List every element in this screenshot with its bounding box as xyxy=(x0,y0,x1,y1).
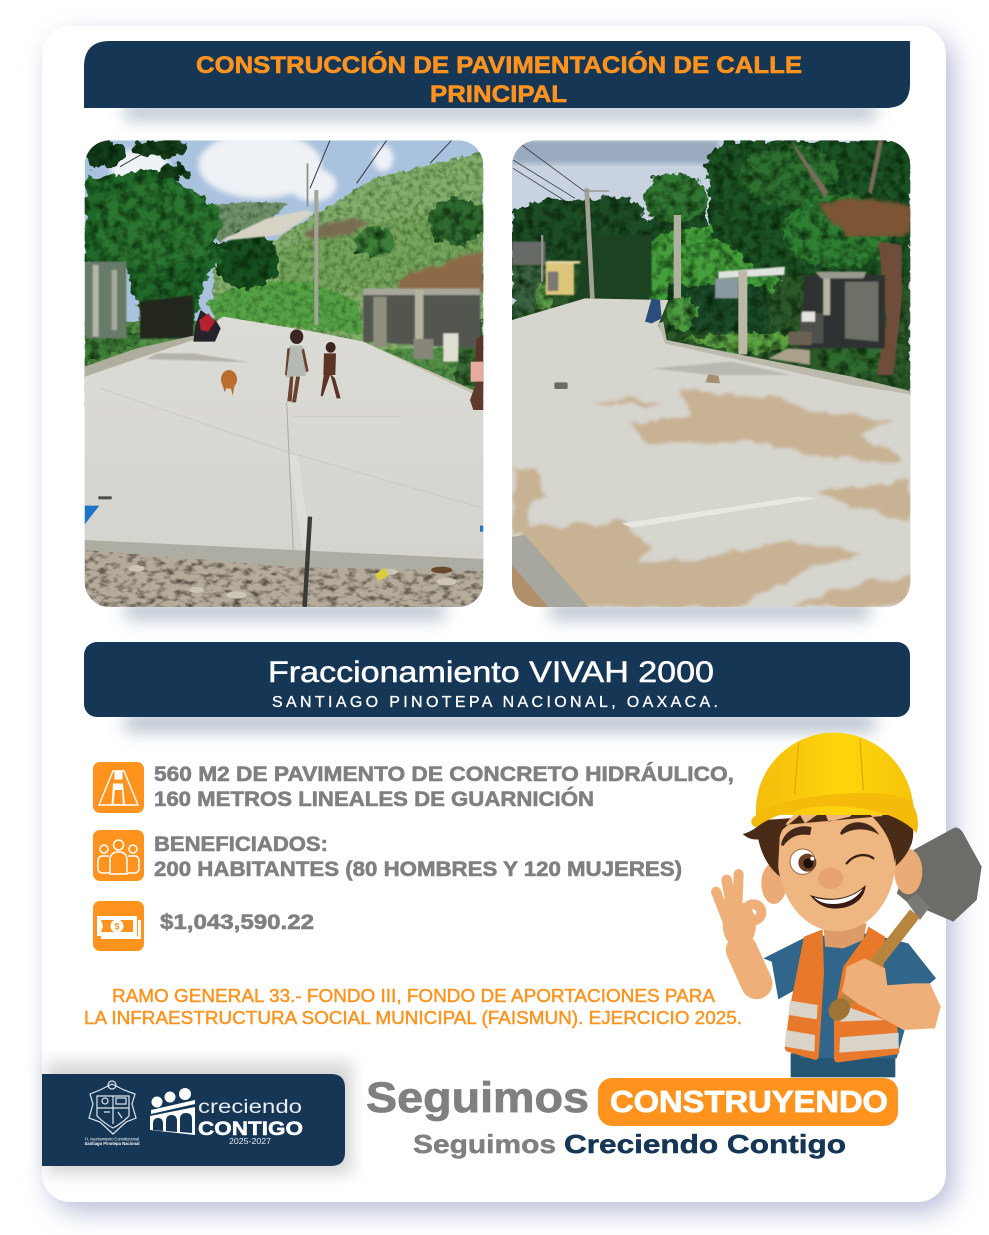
vest xyxy=(785,927,899,1062)
slogan: Seguimos xyxy=(413,1129,556,1159)
mascot: construction worker xyxy=(716,733,982,1077)
location name: Fraccionamiento VIVAH 2000 xyxy=(268,656,714,689)
shovel neck and handle xyxy=(824,893,930,1025)
pavement text xyxy=(154,763,734,811)
municipality name: H. Ayuntamiento Constitucional xyxy=(85,1136,139,1142)
icon: road xyxy=(93,762,144,813)
logo: creciendo contigo: creciendo xyxy=(198,1097,302,1118)
logo: creciendo contigo: CONTIGO xyxy=(198,1119,303,1140)
item: beneficiaries xyxy=(93,830,682,881)
photo: right street with sand xyxy=(512,140,910,620)
footer logo panel xyxy=(42,1062,352,1174)
title xyxy=(196,51,802,108)
motorcycle xyxy=(193,310,221,342)
pavement text: 560 M2 DE PAVIMENTO DE CONCRETO HIDRÁULICO, xyxy=(154,763,734,786)
icon: banknotes xyxy=(93,901,144,951)
shovel blade xyxy=(897,827,982,922)
back hair xyxy=(743,810,913,877)
tree masses xyxy=(83,138,487,385)
face xyxy=(777,799,896,931)
hair fringe xyxy=(765,806,913,875)
grassy hill xyxy=(85,152,483,408)
location subtitle: SANTIAGO PINOTEPA NACIONAL, OAXACA. xyxy=(272,694,718,711)
pavement text: 160 METROS LINEALES DE GUARNICIÓN xyxy=(154,787,594,811)
open eye xyxy=(790,849,816,874)
foliage xyxy=(512,140,910,392)
funding note xyxy=(84,986,742,1028)
neck xyxy=(823,923,867,948)
sand xyxy=(512,392,910,607)
right arm and gripping hand xyxy=(842,958,941,1030)
construyendo pill xyxy=(598,1078,898,1126)
logo: creciendo contigo xyxy=(150,1088,303,1146)
beneficiaries text: 200 HABITANTES (80 HOMBRES Y 120 MUJERES) xyxy=(154,858,682,881)
wink xyxy=(847,855,873,863)
pants xyxy=(791,1053,895,1077)
eyebrows xyxy=(781,822,879,846)
municipality name: Santiago Pinotepa Nacional xyxy=(84,1141,140,1146)
item: pavement xyxy=(93,762,734,813)
funding note: RAMO GENERAL 33.- FONDO III, FONDO DE APORTACIONES PARA xyxy=(112,986,715,1006)
location banner xyxy=(84,642,910,732)
investment amount: $1,043,590.22 xyxy=(160,911,314,934)
icon: banknotes: $ xyxy=(114,922,120,932)
smile xyxy=(810,885,866,909)
title banner xyxy=(84,41,910,120)
shirt xyxy=(763,933,936,1058)
ears xyxy=(761,849,922,904)
photo: left street with children xyxy=(83,132,487,620)
raised arm and ok hand xyxy=(716,874,761,983)
child xyxy=(320,342,341,398)
nose xyxy=(818,868,843,889)
child in dress xyxy=(285,329,309,402)
construyendo pill: CONSTRUYENDO xyxy=(610,1084,888,1119)
helmet xyxy=(751,733,918,833)
item: investment xyxy=(93,901,314,951)
municipality name xyxy=(84,1136,140,1146)
logo: creciendo contigo: 2025-2027 xyxy=(229,1136,271,1146)
beneficiaries text xyxy=(154,833,682,881)
icon: people xyxy=(93,830,144,881)
child at right edge xyxy=(470,335,483,410)
beneficiaries text: BENEFICIADOS: xyxy=(154,833,328,856)
funding note: LA INFRAESTRUCTURA SOCIAL MUNICIPAL (FAISMUN). EJERCICIO 2025. xyxy=(84,1008,742,1028)
curb xyxy=(85,540,483,572)
slogan: Creciendo Contigo xyxy=(564,1129,846,1159)
title: PRINCIPAL xyxy=(430,81,567,108)
coat of arms xyxy=(89,1081,136,1134)
dog xyxy=(221,370,237,396)
slogan xyxy=(366,1074,898,1159)
title: CONSTRUCCIÓN DE PAVIMENTACIÓN DE CALLE xyxy=(196,51,802,79)
slogan: Seguimos xyxy=(366,1074,589,1122)
road xyxy=(512,298,910,607)
